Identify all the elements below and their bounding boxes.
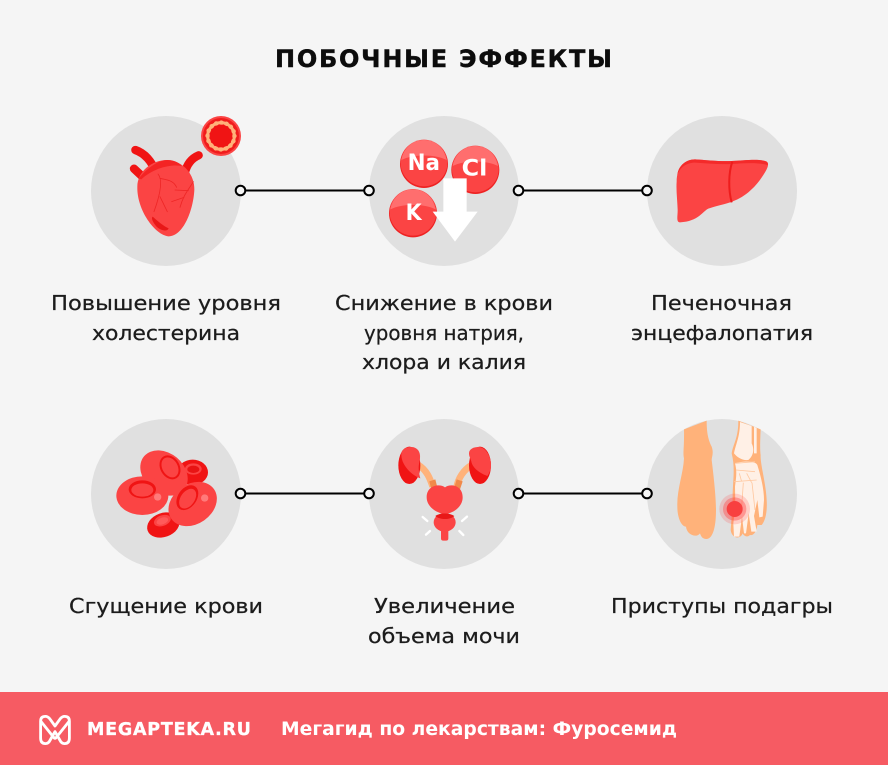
label: low electrolytes: уровня натрия, (364, 321, 524, 345)
connector: row 2 right (514, 489, 652, 498)
label: low electrolytes (335, 291, 553, 374)
label: high cholesterol: холестерина (92, 321, 240, 345)
label: low electrolytes: Снижение в крови (335, 291, 553, 315)
icon: electrolytes with down arrow: Cl (462, 157, 487, 182)
connector: row 2 left (236, 489, 374, 498)
label: hepatic encephalopathy: энцефалопатия (631, 321, 813, 345)
label: increased urine: Увеличение (374, 594, 515, 618)
label: high cholesterol (51, 291, 281, 345)
icon: electrolytes with down arrow: Na (408, 151, 440, 176)
icon: red blood cells (91, 419, 241, 569)
label: blood thickening: Сгущение крови (69, 594, 263, 618)
label: hepatic encephalopathy: Печеночная (651, 291, 792, 315)
icon: electrolytes with down arrow: K (406, 201, 423, 226)
label: hepatic encephalopathy (631, 291, 813, 345)
icon: heart with clogged artery (91, 116, 241, 266)
label: increased urine (368, 594, 520, 648)
connector: row 1 right (514, 186, 652, 195)
footer caption: Мегагид по лекарствам: Фуросемид (281, 718, 677, 740)
label: increased urine: объема мочи (368, 624, 520, 648)
label: high cholesterol: Повышение уровня (51, 291, 281, 315)
icon: electrolytes with down arrow (369, 116, 519, 266)
connector: row 1 left (236, 186, 374, 195)
label: low electrolytes: хлора и калия (362, 350, 526, 374)
icon: logo (41, 716, 69, 744)
icon: urinary system (369, 419, 519, 569)
icon: feet with gout (647, 419, 797, 569)
label: gout attacks: Приступы подагры (611, 594, 833, 618)
icon: liver (647, 116, 797, 266)
brand name: MEGAPTEKA.RU (87, 720, 251, 740)
title: ПОБОЧНЫЕ ЭФФЕКТЫ (275, 45, 612, 73)
footer band (0, 692, 888, 765)
